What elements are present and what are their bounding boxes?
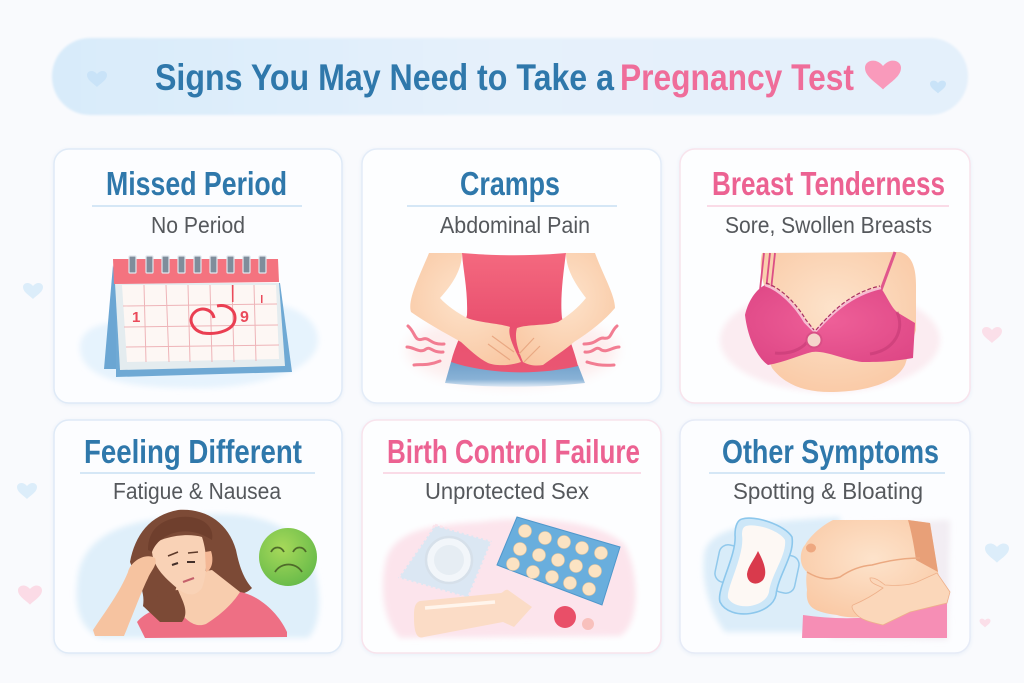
panel: birth control failure	[362, 420, 661, 653]
subheading: No Period	[151, 212, 245, 238]
icon: desk calendar	[80, 256, 318, 388]
heading: Feeling Different	[84, 433, 302, 470]
panel: breast tenderness	[680, 149, 970, 403]
illustration: condoms and pill pack	[383, 517, 636, 638]
title text: Signs You May Need to Take a	[155, 57, 614, 98]
title highlight: Pregnancy Test	[620, 57, 854, 98]
subheading: Abdominal Pain	[440, 212, 590, 238]
heading: Breast Tenderness	[712, 165, 945, 202]
illustration: pink bra	[720, 252, 940, 392]
icon: desk calendar: 9	[240, 309, 249, 326]
icon: small blue heart right	[930, 81, 946, 93]
panel: feeling different	[54, 420, 342, 653]
icon: pink heart	[865, 61, 901, 89]
illustration: abdomen with cramps	[407, 253, 619, 387]
illustration: tired woman with nausea face	[77, 510, 319, 638]
decorative hearts	[17, 283, 1009, 627]
panel: other symptoms	[680, 420, 970, 653]
panel: missed period	[54, 149, 342, 403]
title banner	[52, 38, 968, 115]
icon: small blue heart left	[87, 71, 107, 87]
heading: Missed Period	[106, 165, 287, 202]
panel: cramps	[362, 149, 661, 403]
subheading: Spotting & Bloating	[733, 478, 923, 504]
illustration: pad and bloated belly	[704, 517, 950, 640]
subheading: Fatigue & Nausea	[113, 478, 281, 504]
heading: Cramps	[460, 165, 560, 202]
heading: Other Symptoms	[722, 433, 939, 470]
subheading: Sore, Swollen Breasts	[725, 212, 932, 238]
icon: desk calendar: 1	[132, 309, 140, 326]
subheading: Unprotected Sex	[425, 478, 589, 504]
heading: Birth Control Failure	[387, 433, 640, 470]
